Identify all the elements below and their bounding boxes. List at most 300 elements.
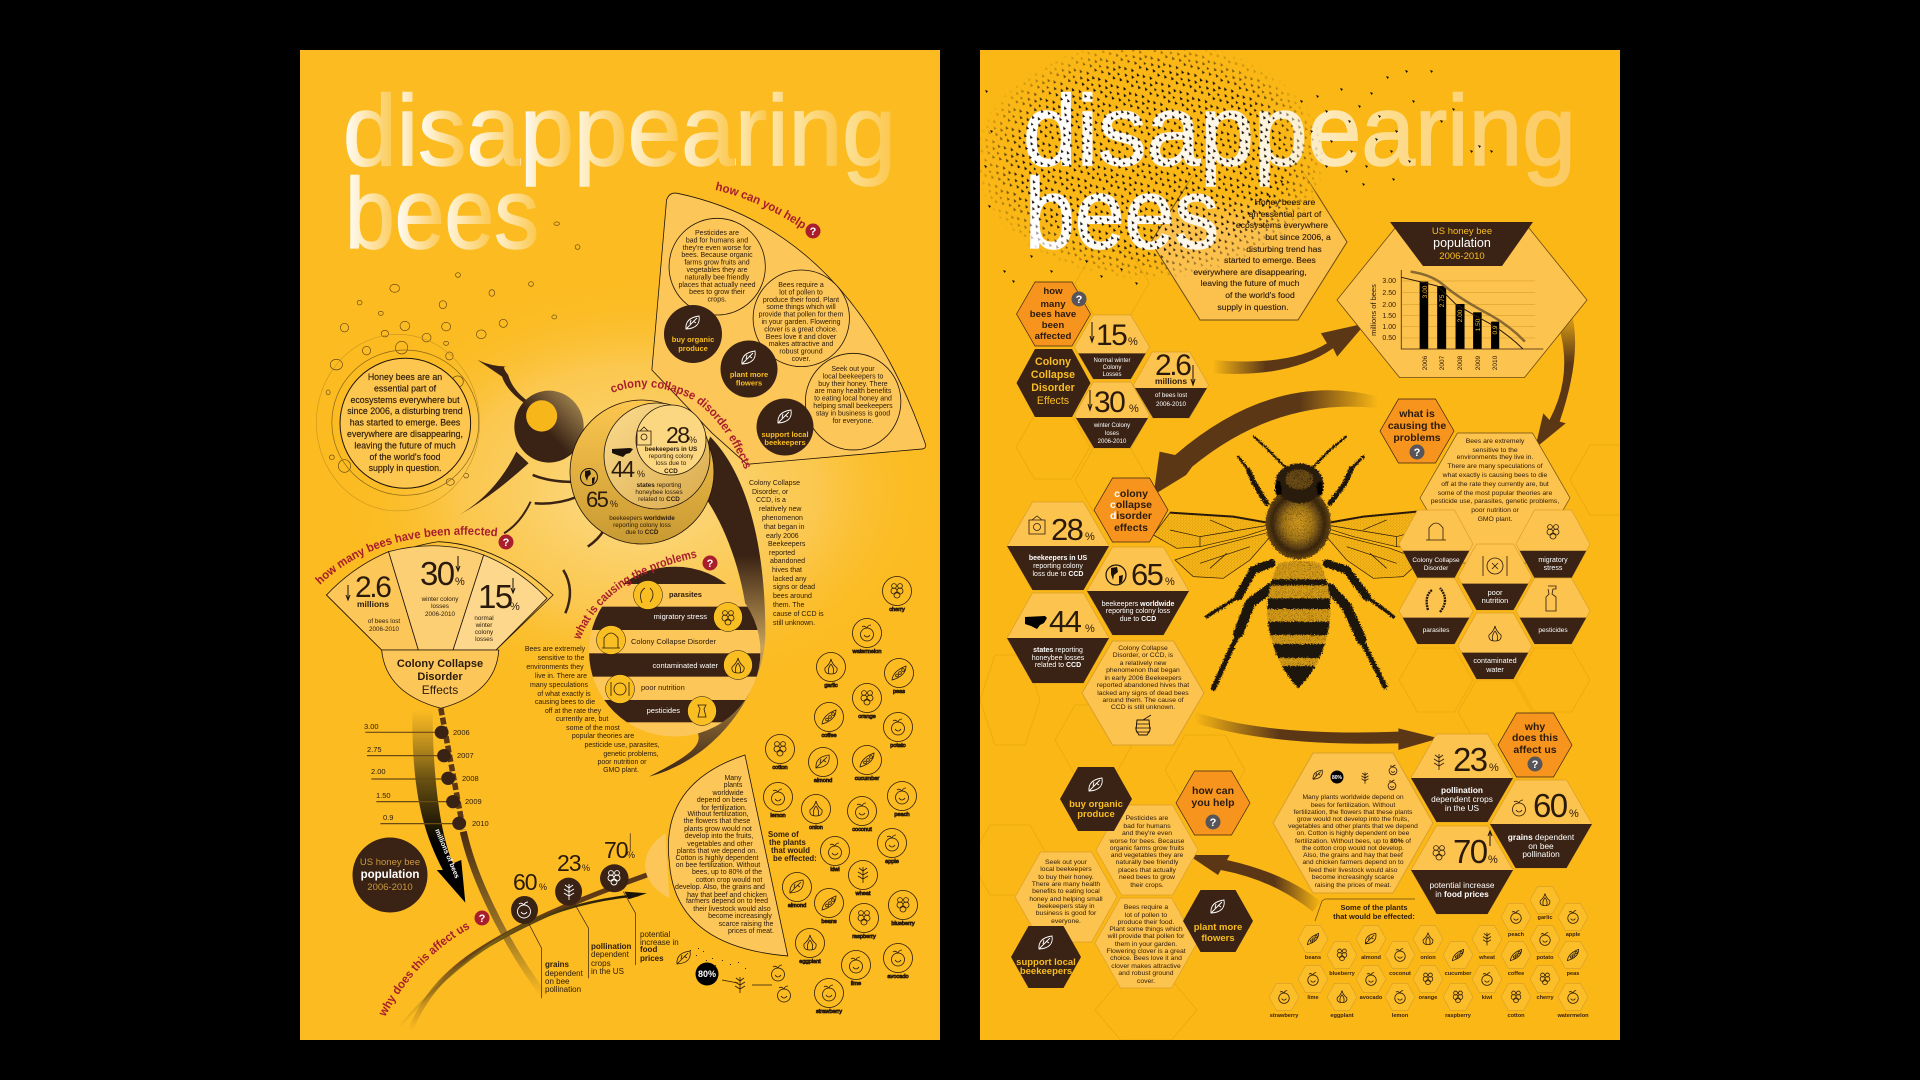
population circle: [352, 838, 428, 912]
80 percent pollen diagram: 80%: [698, 969, 716, 979]
hex: pollen advice: Flowering clover is a great: [1106, 948, 1186, 955]
causes explanatory text: causing bees to die: [535, 699, 595, 706]
hex: colony collapse disorder effects label: colony: [1114, 488, 1148, 500]
hex: support local beekeepers: support local: [1016, 957, 1076, 968]
CCD explanatory column: hives that: [772, 567, 802, 574]
causes explanatory text: many speculations: [530, 682, 588, 689]
hex: migratory stress: migratory: [1538, 557, 1568, 564]
intro circle: has started to emerge. Bees: [350, 418, 461, 428]
hexagon: how many bees: ?: [1076, 294, 1083, 306]
plant: avocado: [884, 944, 912, 980]
plant: kiwi: kiwi: [1482, 995, 1493, 1001]
hex: pesticides advice: naturally bee friendly: [1116, 859, 1179, 866]
hex: many plants explanation: the cotton crop would not develop.: [1302, 845, 1404, 852]
help text: pollen: Bees require a: [778, 282, 824, 289]
intro text: ecosystems everywhere: [1236, 220, 1328, 230]
bowl heading: Effects: [422, 683, 458, 697]
plant: apple: apple: [885, 859, 899, 865]
help text: pollen: cover.: [792, 356, 810, 363]
hex: CCD explanation: Disorder, or CCD, is: [1113, 652, 1174, 659]
hex: plant more flowers: plant more: [1194, 922, 1242, 933]
hex: colony collapse disorder: Colony Collapse: [1412, 557, 1460, 564]
hexagon: what is causing the problems: ?: [1414, 447, 1421, 459]
intro text: Honey bees are: [1255, 197, 1316, 207]
bar chart: 3.00: [1382, 278, 1396, 285]
stat 2.6 million: millions: [357, 599, 389, 609]
stat 30 percent: 30: [420, 555, 455, 592]
bar chart: 2009: [1475, 355, 1482, 370]
hexagon: 30 percent: %: [1129, 403, 1139, 415]
hex: pesticides advice: organic farms grow fruits: [1110, 845, 1185, 852]
intro circle: of the world's food: [369, 452, 441, 462]
65 percent stat: beekeepers worldwide: [609, 515, 675, 522]
plant: beans: [814, 888, 844, 925]
stat 2.6 million: 2006-2010: [369, 626, 400, 633]
hex: many plants explanation: 80%: [1332, 775, 1343, 781]
plant: garlic: garlic: [824, 683, 838, 689]
hex: 44 percent: %: [1085, 623, 1095, 635]
grains label: pollination: [545, 985, 581, 994]
hex: 28 percent: %: [1085, 531, 1095, 543]
hex: beekeepers advice: There are many health: [1032, 881, 1100, 888]
hexagon: how many bees: been: [1042, 320, 1064, 331]
hex: why does this affect us: why: [1524, 721, 1545, 733]
plant: almond: [1356, 926, 1386, 961]
hex: 65 percent: beekeepers worldwide: [1102, 601, 1174, 608]
CCD explanatory column: bees around: [773, 593, 812, 600]
hex: many plants explanation: vegetables and other plants that we depend: [1288, 823, 1418, 830]
help text: pollen: lot of pollen to: [779, 289, 823, 296]
hex: CCD explanation: a relatively new: [1120, 660, 1167, 667]
head: [1275, 463, 1323, 503]
badge: support local beekeepers: support local: [761, 430, 809, 439]
plant: apple: apple: [1566, 932, 1580, 938]
badge: buy organic produce: produce: [678, 344, 708, 353]
hexagon: 2.6 millions: 2.6: [1155, 349, 1191, 382]
hexagon: how many bees: affected: [1035, 331, 1072, 342]
help text: pesticides: vegetables they are: [686, 267, 748, 274]
wings: [1153, 512, 1427, 578]
dome text: their livestock would also: [693, 906, 771, 913]
intro text: but since 2006, a: [1265, 232, 1331, 242]
plant: garlic: garlic: [1538, 915, 1552, 921]
chart header: [1390, 222, 1533, 266]
hex: 70 percent: [1411, 826, 1513, 914]
hex: pesticides advice: [1096, 805, 1198, 895]
hex: 44 percent: 44: [1049, 604, 1082, 639]
bar chart: 2007: [1439, 355, 1446, 370]
population circle: population: [361, 869, 419, 881]
illustration: honey bee: [1153, 437, 1427, 690]
left poster: bee-shaped layout: [300, 50, 940, 1040]
fan: [327, 542, 553, 708]
bowl heading: Disorder: [417, 671, 463, 683]
stat 15 percent: normal: [474, 615, 494, 622]
plant: onion: onion: [809, 825, 823, 831]
plant: cucumber: cucumber: [1445, 971, 1472, 977]
timeline labels: 1.50: [376, 791, 391, 800]
hex: 44 percent: honeybee losses: [1032, 655, 1085, 662]
help text: pollen: produce their food. Plant: [763, 297, 839, 304]
timeline labels: 2008: [462, 774, 479, 783]
hex: many plants explanation: Many plants worldwide depend on: [1302, 794, 1404, 801]
section: how can you help hexes: [1011, 767, 1253, 988]
timeline spine and nodes: [365, 708, 545, 997]
legs and antennae: [1207, 437, 1393, 688]
intro circle: since 2006, a disturbing trend: [347, 406, 463, 416]
hex: many plants explanation: on. Cotton is highly dependent on bee: [1297, 830, 1410, 837]
hex: pollen advice: and robust ground: [1118, 970, 1174, 977]
hexagon: how many bees: many: [1040, 299, 1066, 310]
hex: CCD explanation: phenomenon that began: [1106, 667, 1180, 674]
heading: colony collapse disorder effects: [611, 380, 750, 469]
dome text: vegetables and other: [687, 841, 753, 848]
section: how can you help wing: [652, 182, 926, 465]
plant: coffee: coffee: [821, 733, 837, 739]
hex: pesticides: [1516, 578, 1590, 644]
hex: pesticides advice: places that actually: [1118, 867, 1177, 874]
plant: blueberry: [888, 890, 918, 927]
stat 30 percent: 2006-2010: [425, 611, 456, 618]
hexagon: causes explanation: what exactly is causing bees to die: [1442, 472, 1548, 479]
timeline labels: 0.9: [383, 813, 393, 822]
arrow: to how can you help: [1188, 855, 1321, 912]
plant: onion: [1413, 926, 1443, 961]
28 percent stat: loss due to: [656, 460, 687, 467]
hex: colony collapse disorder effects label: collapse: [1110, 499, 1152, 511]
pollination label: crops: [591, 959, 611, 968]
intro text: of the world's food: [1225, 290, 1295, 300]
stat 15 percent: %: [510, 601, 520, 613]
causes explanatory text: some of the most: [566, 725, 620, 732]
intro text: an essential part of: [1249, 209, 1322, 219]
help text: pesticides: naturally bee friendly: [685, 274, 750, 281]
chart hexagon: [1337, 222, 1587, 378]
hex: colony collapse disorder effects label: effects: [1114, 522, 1148, 534]
help text: pesticides: Pesticides are: [695, 230, 739, 237]
hex: 23 percent: pollination: [1441, 785, 1483, 795]
plant: almond: almond: [1361, 955, 1382, 961]
hex: support local beekeepers: [1011, 926, 1081, 988]
heading: how can you help: how can you help: [716, 182, 805, 229]
bar chart: 3.00: [1422, 285, 1429, 298]
help text: beekeepers: buy their honey. There: [818, 381, 888, 388]
stat 15 percent: 15: [478, 578, 512, 615]
hexagon: causes explanation: environments they live in.: [1457, 454, 1533, 461]
hex: 44 percent: [1007, 593, 1109, 683]
causes explanatory text: popular theories are: [572, 733, 634, 740]
bar chart: 2010: [1492, 355, 1499, 370]
dome text: depend on bees: [697, 797, 748, 804]
badge: plant more flowers: flowers: [736, 378, 762, 388]
hex: 23 percent: dependent crops: [1431, 794, 1493, 804]
hex: pollen advice: clover makes attractive: [1111, 963, 1181, 970]
help text: pollen: makes attractive and: [769, 341, 833, 348]
plant: wheat: wheat: [1478, 955, 1495, 961]
question badge: [702, 556, 718, 570]
plant: cotton: [766, 734, 794, 771]
food prices label: increase in: [640, 938, 679, 947]
hex: many plants explanation: grow would not develop into the fruits,: [1297, 816, 1409, 823]
heading: how many bees have been affected: [314, 526, 498, 584]
cause: pesticides: pesticides: [647, 706, 680, 715]
hexagon: 15 percent: Colony: [1103, 365, 1121, 371]
hex: contaminated water: contaminated: [1473, 656, 1517, 665]
hexagon: 15 percent: Losses: [1102, 372, 1122, 378]
hex: pesticides advice: and they're even: [1122, 830, 1172, 837]
plant: beans: beans: [821, 919, 837, 925]
grains label: dependent: [545, 969, 584, 978]
hex: pesticides advice: bad for humans: [1123, 823, 1171, 830]
hex: 28 percent: loss due to CCD: [1033, 571, 1083, 578]
intro circle: supply in question.: [369, 463, 441, 473]
hex: beekeepers advice: honey and helping small: [1029, 896, 1103, 903]
cause: parasites: parasites: [669, 590, 702, 599]
hex: pollen advice: Plant some things which: [1109, 926, 1183, 933]
hex: contaminated water: [1458, 613, 1532, 679]
44 percent stat: honeybee losses: [635, 489, 683, 496]
hexagon: causes explanation: Bees are extremely: [1466, 438, 1525, 445]
percentages: 70: [604, 837, 628, 863]
plant: avocado: [1356, 966, 1386, 1001]
hex: 28 percent: 28: [1051, 512, 1083, 547]
cause: colony collapse disorder: Colony Collapse Disorder: [631, 637, 717, 646]
hex: CCD explanation: reported abandoned hives that: [1097, 682, 1189, 689]
dome text: become increasingly: [708, 913, 772, 920]
plant: cherry: cherry: [889, 607, 905, 613]
help text: pollen: provide that pollen for them: [759, 312, 844, 319]
hexagon: colony collapse disorder effects: Disorder: [1031, 382, 1075, 394]
section: why does this affect us hexes: [1273, 713, 1592, 914]
abdomen: [1266, 560, 1332, 688]
hex: parasites: parasites: [1423, 627, 1450, 634]
hexagon: colony collapse disorder effects: Colony: [1035, 356, 1071, 368]
plant: peach: peach: [894, 812, 910, 818]
intro text: everywhere are disappearing,: [1193, 267, 1307, 277]
plant: orange: [852, 684, 882, 720]
plant: lime: lime: [1307, 995, 1319, 1001]
section: how many bees affected hexes: [1016, 282, 1208, 448]
bee silhouette: head, antenna, legs: [459, 360, 604, 613]
hex: 44 percent: related to CCD: [1035, 662, 1081, 669]
cause: poor nutrition: [606, 674, 685, 704]
hex: beekeepers advice: business is good for: [1036, 910, 1097, 917]
plant: cucumber: cucumber: [855, 776, 879, 782]
dome panel: [645, 755, 788, 956]
hex: how can you help: you help: [1191, 797, 1235, 809]
plants heading right: Some of the plants: [1340, 903, 1408, 912]
dome text: for fertilization.: [701, 805, 747, 812]
80 percent pollen diagram: [677, 948, 790, 1002]
plant: raspberry: [850, 904, 878, 940]
dome text: worldwide: [711, 790, 744, 797]
bar chart: millions of bees: [1369, 284, 1378, 336]
dome text: develop into the fruits,: [685, 833, 753, 840]
help text: beekeepers: stay in business is good: [816, 410, 890, 417]
section: colony collapse disorder effects: [570, 380, 824, 627]
help text: pesticides: bees to grow their: [689, 289, 745, 296]
cause: contaminated water: contaminated water: [653, 661, 719, 670]
stat 15 percent: [474, 578, 520, 643]
section: causes hexes: [1399, 510, 1590, 679]
hex: pesticides advice: their crops.: [1130, 882, 1164, 889]
plant: apple: [878, 828, 906, 865]
plant: strawberry: strawberry: [1270, 1013, 1299, 1019]
hex: how can you help: [1176, 771, 1250, 835]
stat 30 percent: [420, 555, 465, 618]
CCD explanatory column: early 2006: [766, 533, 799, 540]
stat 2.6 million: of bees lost: [368, 618, 400, 625]
help text: pollen: some things which will: [766, 304, 836, 311]
dome text: Without fertilization,: [687, 811, 749, 818]
44 percent stat: states reporting: [637, 482, 681, 489]
plant: almond tree: almond: [788, 903, 806, 909]
help text: pollen: robust ground: [779, 349, 823, 356]
CCD explanatory column: reported: [769, 550, 795, 557]
stat 30 percent: %: [455, 576, 465, 588]
hexagon: 15 percent: Normal winter: [1093, 358, 1131, 364]
section: what is causing the problems: [525, 552, 760, 774]
plant: coffee: coffee: [1508, 971, 1524, 977]
hex: many plants explanation: become increasingly scarce: [1312, 874, 1395, 881]
hexagon: 15 percent: 15: [1096, 319, 1127, 352]
timeline labels: 2006: [453, 728, 470, 737]
hex: migratory stress: [1516, 510, 1590, 578]
hexagon: 2.6 millions: of bees lost: [1155, 392, 1187, 399]
hexagon: colony collapse disorder effects: Collapse: [1031, 369, 1075, 381]
hex: CCD explanation: lacked any signs of dead bees: [1097, 690, 1189, 697]
plant: cotton: cotton: [1507, 1013, 1525, 1019]
plant: almond tree: [782, 872, 812, 909]
wing fan shape: [652, 193, 926, 464]
28 percent stat: beekeepers in US: [645, 446, 697, 453]
dome text: on bee fertilization. Without: [676, 862, 760, 869]
title right: disappearing: [1023, 75, 1576, 187]
heading: why does this affect us: [380, 924, 470, 1016]
plant: cucumber: [852, 746, 882, 782]
hex: 70 percent: potential increase: [1429, 880, 1495, 890]
hexagon: what is causing the problems: causing the: [1388, 420, 1446, 432]
plant: potato: potato: [1536, 955, 1554, 961]
CCD explanatory column: relatively new: [759, 506, 802, 513]
brown and olive sweep lines: [398, 875, 647, 1030]
hexagon: how many bees: bees have: [1030, 309, 1076, 320]
hex: pollen advice: Bees require a: [1124, 904, 1168, 911]
hex: many plants explanation: fertilization. Without bees, up to 80% of: [1295, 838, 1411, 845]
plants note: the plants: [769, 838, 806, 847]
dome text: bees, up to 80% of the: [692, 869, 762, 876]
hex: beekeepers advice: everyone.: [1051, 918, 1081, 925]
title right: [1023, 75, 1576, 270]
hex: 28 percent: [1007, 502, 1109, 590]
28 percent stat: 28: [666, 422, 689, 448]
population circle: 2006-2010: [367, 882, 413, 893]
plant: strawberry: strawberry: [816, 1009, 842, 1015]
causes explanatory text: currently are, but: [556, 716, 608, 723]
CCD explanatory column: abandoned: [770, 558, 805, 565]
plant: eggplant: [796, 928, 824, 965]
CCD explanatory column: signs or dead: [773, 584, 815, 591]
floating bubbles: [326, 222, 580, 485]
cause: parasites: [634, 580, 702, 610]
CCD explanatory column: that began in: [764, 524, 805, 531]
hex: how can you help: how can: [1192, 785, 1234, 797]
plant: coffee: [814, 702, 844, 739]
plant: coconut: coconut: [1389, 971, 1411, 977]
plant: watermelon: watermelon: [1556, 1013, 1589, 1019]
central glow: [340, 280, 940, 700]
28 percent stat: [637, 422, 697, 475]
arrow: to population chart: [1213, 323, 1366, 374]
hexagon: 30 percent: loses: [1105, 431, 1119, 437]
help text: beekeepers: Seek out your: [831, 366, 875, 373]
hex: many plants explanation: bees for fertilization. Without: [1311, 802, 1395, 809]
hex: CCD explanation: CCD is still unknown.: [1111, 704, 1175, 711]
plants heading right: [1315, 899, 1415, 921]
plant: watermelon: [852, 618, 882, 655]
hexagon: how many bees: how: [1043, 286, 1063, 297]
food prices label: potential: [640, 930, 670, 939]
hexagon: causes explanation: off at the rate they currently are, but: [1441, 481, 1549, 488]
plant: coconut: [1385, 942, 1415, 977]
plants heading right: that would be effected:: [1333, 912, 1415, 921]
question badge: [474, 910, 490, 926]
hexagon: 30 percent: [1074, 382, 1150, 448]
hex: why does this affect us: does this: [1512, 732, 1558, 744]
CCD explanatory column: Disorder, or: [752, 489, 789, 496]
plant: wheat: wheat: [855, 891, 871, 897]
title left: bees: [345, 158, 539, 270]
hexagon: what is causing the problems: problems: [1393, 432, 1441, 444]
hex: 28 percent: reporting colony: [1033, 563, 1083, 570]
plant: peach: peach: [1508, 932, 1525, 938]
intro circle: [316, 334, 480, 511]
food prices label: food: [640, 945, 657, 954]
plant: lime: lime: [851, 981, 861, 987]
plant: cotton: [1501, 984, 1531, 1019]
nested circles: [570, 400, 714, 544]
plant: orange: [1413, 966, 1443, 1001]
hex: many plants explanation: Also, the grains and hay that beef: [1303, 852, 1403, 859]
plant: orange: orange: [1419, 995, 1437, 1001]
hex: support local beekeepers: beekeepers: [1020, 966, 1072, 977]
plant: eggplant: eggplant: [1330, 1013, 1354, 1019]
plant: almond: [808, 748, 838, 784]
help text: beekeepers: helping small beekeepers: [813, 403, 893, 410]
hexagon: 2.6 millions: [1134, 349, 1208, 418]
plant: coconut: coconut: [852, 827, 872, 833]
plant: coffee: [1501, 942, 1531, 977]
bar chart: 1.50: [1382, 313, 1396, 320]
hexagon: causes explanation: poor nutrition or: [1471, 507, 1520, 514]
CCD explanatory column: them. The: [773, 602, 804, 609]
hex: migratory stress: stress: [1544, 565, 1563, 572]
hex: 70 percent: in food prices: [1435, 889, 1489, 899]
percent signs: %: [627, 850, 635, 860]
hex: poor nutrition: [1458, 544, 1532, 610]
dome text: plants grow would not: [684, 826, 752, 833]
28 percent stat: reporting colony: [649, 453, 694, 460]
plant: lime: [1298, 966, 1328, 1001]
help text: beekeepers: local beekeepers to: [823, 373, 883, 380]
intro circle: ecosystems everywhere but: [350, 395, 460, 405]
plant: coconut: [848, 796, 876, 833]
dome text: Cotton is highly dependent: [676, 855, 758, 862]
plant: strawberry: [814, 978, 844, 1015]
hexagon: 30 percent: 2006-2010: [1098, 439, 1127, 445]
cause: pesticides: [647, 696, 716, 726]
percent signs: %: [582, 863, 590, 873]
